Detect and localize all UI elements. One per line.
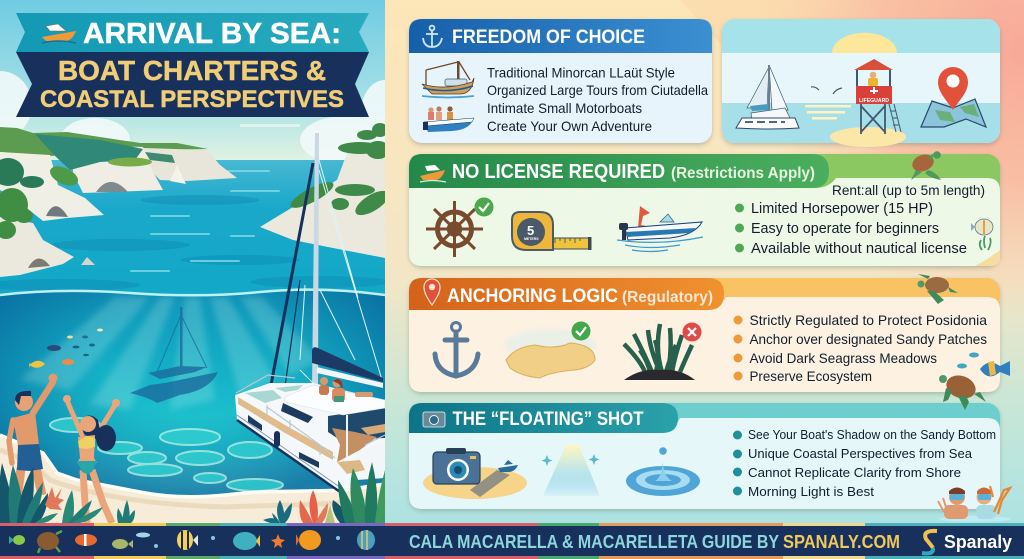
boom and sail cover (312, 347, 383, 382)
icon: camera on sand with boat shadow (423, 448, 527, 499)
icon: light beam (542, 445, 600, 496)
list (487, 64, 708, 134)
tropical leaves left (0, 463, 135, 523)
icon: tape measure: METERS (524, 237, 539, 241)
icon: tape measure (512, 212, 592, 250)
tropical plant and coral right (263, 462, 385, 524)
heading note: (Restrictions Apply) (671, 165, 815, 182)
heading note: (Regulatory) (622, 289, 713, 306)
man waving (9, 374, 58, 500)
deck hatches (245, 390, 282, 403)
icon: tropical fish with school (957, 352, 1010, 376)
mast and rigging (312, 133, 319, 388)
list: Available without nautical license (751, 241, 967, 257)
list: Traditional Minorcan LLaüt Style (487, 64, 675, 80)
boat shadow on sand (130, 307, 218, 403)
list: See Your Boat's Shadow on the Sandy Bottom (748, 427, 996, 442)
list: Intimate Small Motorboats (487, 100, 642, 116)
icon: boat (420, 165, 446, 182)
icon: traditional boat (422, 61, 474, 98)
left cliff (0, 152, 104, 221)
icon: seagrass (624, 324, 695, 380)
bullets (733, 430, 742, 496)
caustic pattern on shallow water (50, 418, 283, 491)
lower left cliff (0, 217, 74, 277)
list: Avoid Dark Seagrass Meadows (750, 350, 937, 366)
panel: anchoring logic (409, 274, 1000, 392)
water streaks (0, 195, 390, 291)
icon: anchor (423, 26, 442, 47)
list: Cannot Replicate Clarity from Shore (748, 465, 961, 480)
underwater gradient (0, 291, 385, 495)
icon: birds (811, 87, 842, 94)
heading: NO LICENSE REQUIRED (452, 161, 665, 183)
icon: lifeguard tower: LIFEGUARD (859, 98, 889, 104)
panel: beach illustration (722, 19, 1000, 147)
logo word: Spanaly (944, 532, 1012, 552)
light rays (20, 297, 320, 410)
list (750, 312, 987, 384)
footer site: SPANALY.COM (783, 531, 900, 552)
sea surface (0, 160, 385, 295)
list: Anchor over designated Sandy Patches (750, 331, 987, 347)
title line 2: BOAT CHARTERS & (58, 55, 326, 86)
clouds (0, 71, 409, 164)
hull windows (248, 415, 262, 431)
cockpit (328, 408, 385, 440)
page background (385, 0, 1024, 559)
icon: big turtle (939, 372, 986, 410)
heading: ANCHORING LOGIC (447, 285, 618, 307)
rock (81, 257, 95, 265)
list (751, 201, 967, 257)
icon: small motorboat (617, 206, 703, 252)
icon: tape measure: 5 (527, 223, 534, 238)
woman waving (63, 395, 120, 523)
icon: fish and seaweed (971, 219, 1000, 266)
list: Create Your Own Adventure (487, 118, 652, 134)
railings (236, 375, 385, 458)
icon: camera (423, 412, 445, 427)
deck stripe (238, 397, 333, 460)
list: Morning Light is Best (748, 484, 874, 499)
list: Strictly Regulated to Protect Posidonia (750, 312, 987, 328)
icon: sandy patch (504, 329, 596, 378)
list: Organized Large Tours from Ciutadella (487, 82, 708, 98)
hull (235, 383, 385, 495)
list: Unique Coastal Perspectives from Sea (748, 446, 973, 461)
icon: water lines (805, 105, 851, 120)
small fish (29, 328, 103, 368)
title line 1: ARRIVAL BY SEA: (83, 18, 341, 50)
footer bar (0, 523, 1024, 559)
list: Limited Horsepower (15 HP) (751, 201, 933, 217)
right cliff (260, 150, 385, 258)
note: Rent:all (up to 5m length) (832, 182, 985, 198)
icon: green check (572, 322, 590, 340)
panel: the floating shot (409, 403, 1000, 509)
passengers (319, 377, 373, 402)
icon: red cross (682, 322, 702, 342)
heading: FREEDOM OF CHOICE (452, 26, 645, 48)
icon: ship wheel (426, 201, 483, 257)
icon: location pin (424, 279, 440, 305)
catamaran with passengers (235, 133, 385, 495)
icon: map with pin (921, 67, 986, 127)
icon: spanaly logo (922, 531, 937, 553)
aft hull and steps (358, 470, 385, 480)
icon row: sea creatures (9, 530, 375, 553)
surface wave line (0, 290, 385, 295)
panel: no license required (409, 151, 1000, 266)
teal ribbon (16, 13, 369, 52)
cabin top (285, 385, 385, 415)
fender (274, 431, 280, 447)
sky (0, 0, 385, 165)
bullets (735, 204, 744, 252)
icon: green check (474, 198, 494, 216)
list (748, 427, 996, 499)
navy ribbon (16, 52, 369, 117)
icon: sailing catamaran (736, 65, 799, 129)
title line 3: COASTAL PERSPECTIVES (40, 86, 344, 113)
beach (0, 435, 385, 523)
rainbow stripes (0, 523, 1024, 559)
panel: freedom of choice (409, 19, 712, 143)
icon: small motorboat with people (423, 106, 474, 132)
illustration: Mediterranean cove scene (0, 0, 409, 524)
icon: turtle top (918, 274, 958, 304)
heading: THE “FLOATING” SHOT (452, 409, 644, 430)
icon: anchor (435, 322, 478, 376)
bullets (734, 316, 742, 380)
title banner (16, 13, 369, 117)
icon: lifeguard tower (830, 59, 906, 147)
list: Preserve Ecosystem (750, 368, 872, 384)
list: Easy to operate for beginners (751, 221, 939, 237)
icon: water drop ripple (626, 447, 700, 496)
icon: turtle (910, 151, 941, 180)
coral left (45, 487, 64, 510)
icon: snorkelers (938, 486, 1011, 522)
icon: yacht (42, 24, 76, 43)
back cliffs (0, 127, 208, 156)
footer text: CALA MACARELLA & MACARELLETA GUIDE BY (409, 531, 780, 552)
